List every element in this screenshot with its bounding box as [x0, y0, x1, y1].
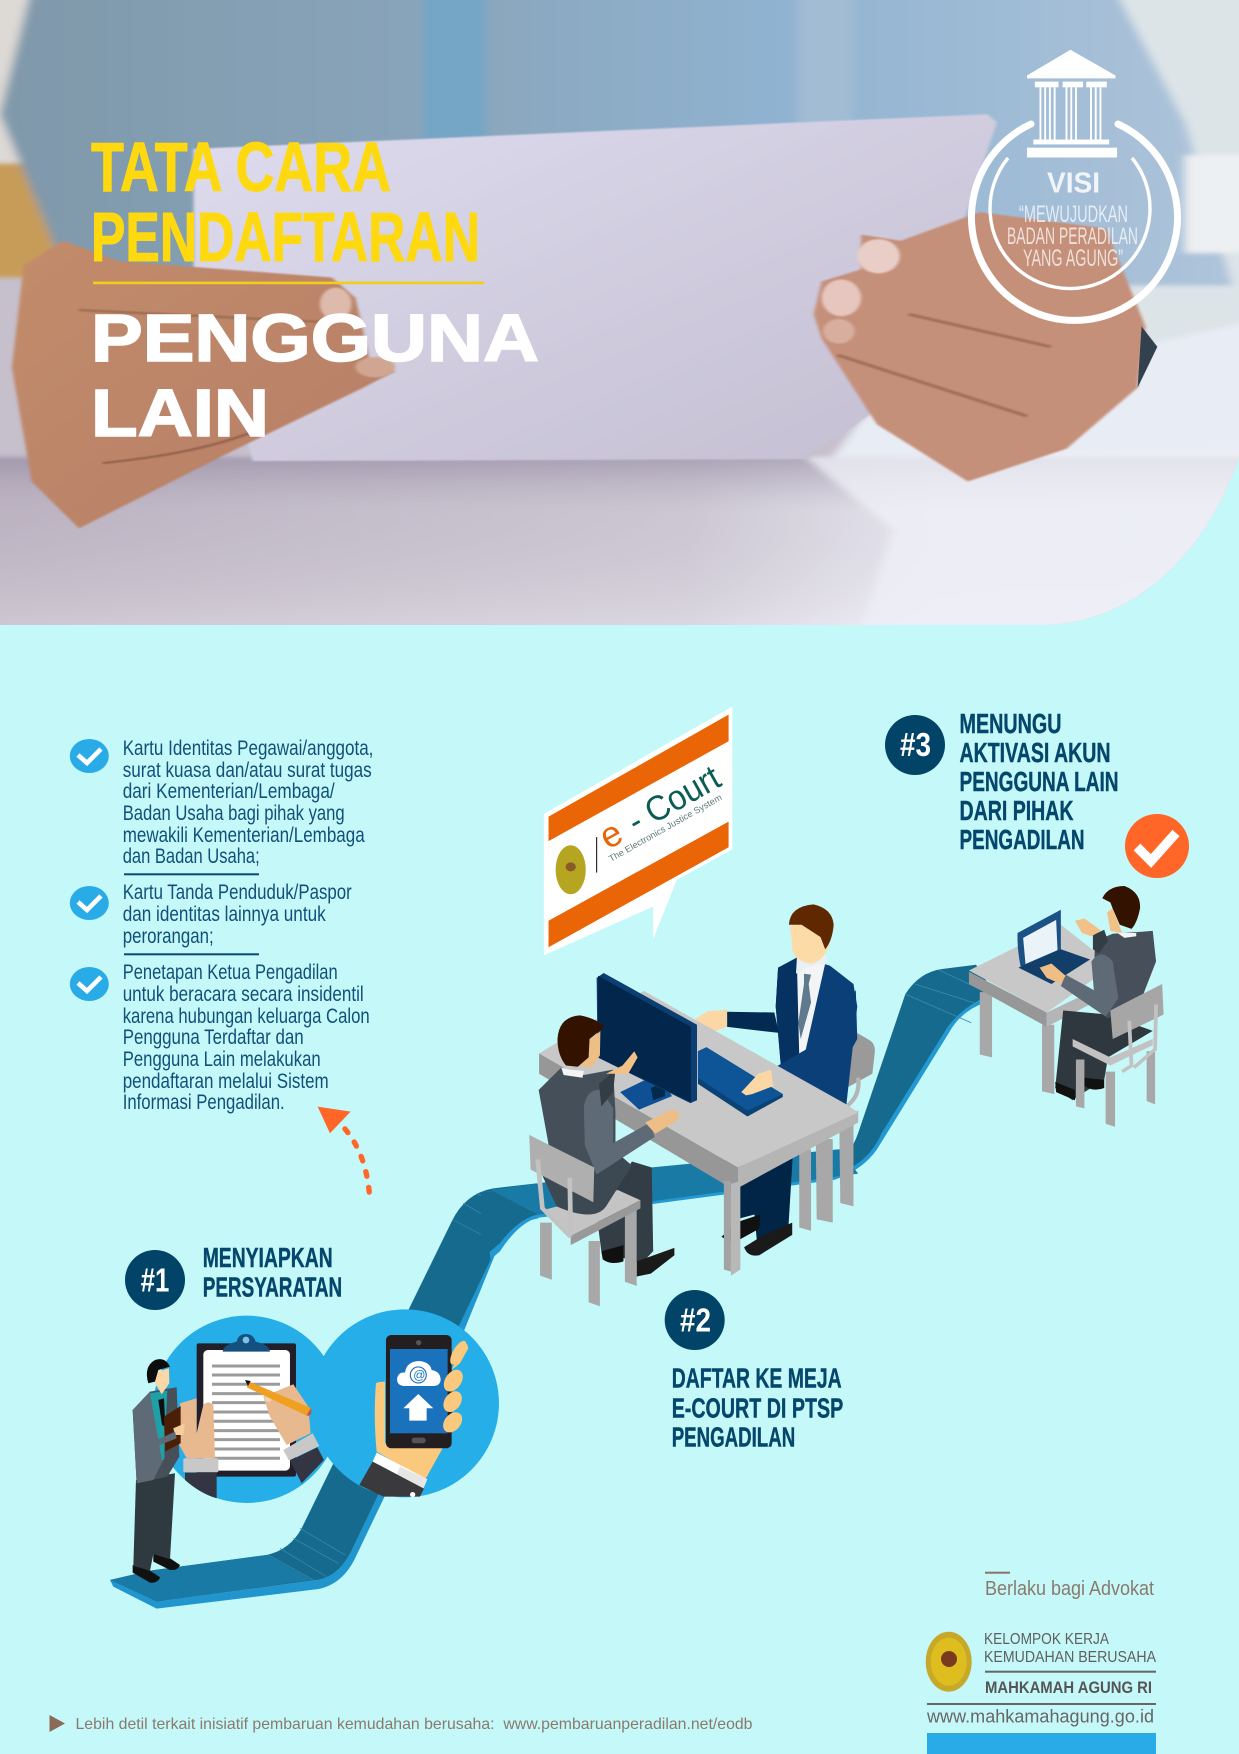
laptop: [1017, 910, 1090, 984]
computer monitor: [597, 973, 697, 1110]
step 1 heading: [203, 1242, 342, 1303]
step 1 badge: #1: [141, 1262, 169, 1299]
scene: daftar ke meja e-court desk: [529, 904, 875, 1306]
ribbon path upper: [481, 965, 995, 1259]
logo text: - Court: [621, 758, 727, 841]
badge: visi: “MEWUJUDKAN: [1019, 201, 1128, 228]
requirement 2: dan identitas lainnya untuk: [123, 903, 326, 926]
badge: visi: VISI: [1047, 168, 1100, 200]
figure: officer in blue suit: [696, 904, 857, 1104]
step 2 heading: PENGADILAN: [672, 1422, 795, 1453]
second chair: [1073, 984, 1164, 1127]
step 3 heading: PENGADILAN: [960, 824, 1084, 855]
requirement 1: dari Kementerian/Lembaga/: [123, 780, 335, 803]
note: berlaku bagi advokat: Berlaku bagi Advokat: [985, 1578, 1154, 1600]
footer logo block: [926, 1631, 1157, 1754]
title: pengguna lain: LAIN: [91, 376, 269, 451]
icon: orange check: [1125, 814, 1189, 878]
requirement 1: Badan Usaha bagi pihak yang: [123, 802, 345, 825]
figure: seated client with chair: [529, 1015, 679, 1306]
title: pengguna lain: [91, 301, 539, 451]
footer logo block: MAHKAMAH AGUNG RI: [985, 1678, 1152, 1697]
icon: court building: [1027, 50, 1117, 157]
requirement 3: Pengguna Lain melakukan: [123, 1048, 321, 1071]
step 1 badge: [125, 1250, 185, 1310]
logo text: [592, 758, 727, 864]
requirement 3: pendaftaran melalui Sistem: [123, 1070, 329, 1093]
requirement 3: Informasi Pengadilan.: [123, 1091, 285, 1114]
badge: visi: BADAN PERADILAN: [1007, 223, 1138, 250]
requirement 1: surat kuasa dan/atau surat tugas: [123, 759, 372, 782]
footer logo block: KELOMPOK KERJA: [984, 1631, 1110, 1648]
step 2 heading: E-COURT DI PTSP: [672, 1393, 843, 1424]
badge: visi: [972, 50, 1178, 320]
bubble panel: [544, 707, 732, 955]
footer logo block: KEMUDAHAN BERUSAHA: [984, 1649, 1157, 1666]
arrow: dashed to requirements: [318, 1107, 370, 1203]
hero photo: hands holding paper: [0, 0, 1239, 636]
title divider: [93, 282, 484, 284]
requirement 3: karena hubungan keluarga Calon: [123, 1005, 370, 1028]
requirements list: [70, 737, 373, 1114]
step 3 heading: AKTIVASI AKUN: [960, 737, 1110, 768]
step 3 badge: [885, 715, 945, 775]
step 3 badge: #3: [900, 726, 931, 763]
footer note: Lebih detil terkait inisiatif pembaruan kemudahan berusaha: www.pembaruanperadilan.net/eodb: [76, 1716, 753, 1733]
step 3 heading: [960, 708, 1118, 855]
speech bubble: e-court: [544, 707, 732, 955]
requirement 3: untuk beracara secara insidentil: [123, 983, 364, 1006]
scene: activation desk: [969, 886, 1164, 1127]
requirement 3: Pengguna Terdaftar dan: [123, 1026, 304, 1049]
step 3 heading: MENUNGU: [960, 708, 1062, 739]
icon: hand holding phone: [359, 1335, 470, 1497]
logo text: e: [592, 811, 629, 857]
circle: clipboard: [153, 1316, 340, 1503]
requirement 3: [70, 961, 370, 1114]
step 1 heading: MENYIAPKAN: [203, 1242, 333, 1273]
requirement 3: Penetapan Ketua Pengadilan: [123, 961, 338, 984]
figure: standing man with folder: [133, 1359, 185, 1583]
officer legs: [722, 1149, 793, 1256]
step 2 badge: #2: [680, 1302, 711, 1339]
logo text: The Electronics Justice System: [607, 792, 723, 864]
icon: court emblem: [926, 1632, 972, 1692]
figure: court officer at laptop: [1040, 886, 1156, 1100]
second desk: [969, 925, 1113, 1094]
requirement 2: Kartu Tanda Penduduk/Paspor: [123, 881, 352, 904]
requirement 1: Kartu Identitas Pegawai/anggota,: [123, 737, 373, 760]
step 3 heading: DARI PIHAK: [960, 795, 1074, 826]
step 1 heading: PERSYARATAN: [203, 1272, 342, 1303]
title: pengguna lain: PENGGUNA: [91, 301, 539, 376]
title: tata cara pendaftaran: PENDAFTARAN: [91, 198, 480, 276]
keyboard: [698, 1047, 783, 1117]
icon: hand holding phone: @: [413, 1368, 425, 1382]
requirement 2: perorangan;: [123, 925, 214, 948]
badge: visi: YANG AGUNG”: [1023, 245, 1123, 272]
step 2 badge: [665, 1290, 725, 1350]
requirement 2: [70, 881, 352, 948]
icon: hands with pencil: [178, 1380, 324, 1498]
title: tata cara pendaftaran: TATA CARA: [91, 128, 391, 206]
title: tata cara pendaftaran: [91, 128, 480, 276]
icon: clipboard with checklist: [197, 1334, 296, 1477]
desk: [539, 991, 858, 1276]
chair behind officer: [846, 1027, 875, 1106]
requirement 1: mewakili Kementerian/Lembaga: [123, 824, 365, 847]
step 2 heading: [672, 1363, 843, 1453]
ribbon path: [110, 1183, 538, 1609]
requirement 1: dan Badan Usaha;: [123, 845, 260, 868]
footer logo block: www.mahkamahagung.go.id: [926, 1707, 1154, 1727]
step 3 heading: PENGGUNA LAIN: [960, 766, 1118, 797]
circle: phone upload: [311, 1309, 499, 1497]
requirement 1: [70, 737, 373, 868]
step 2 heading: DAFTAR KE MEJA: [672, 1363, 842, 1394]
